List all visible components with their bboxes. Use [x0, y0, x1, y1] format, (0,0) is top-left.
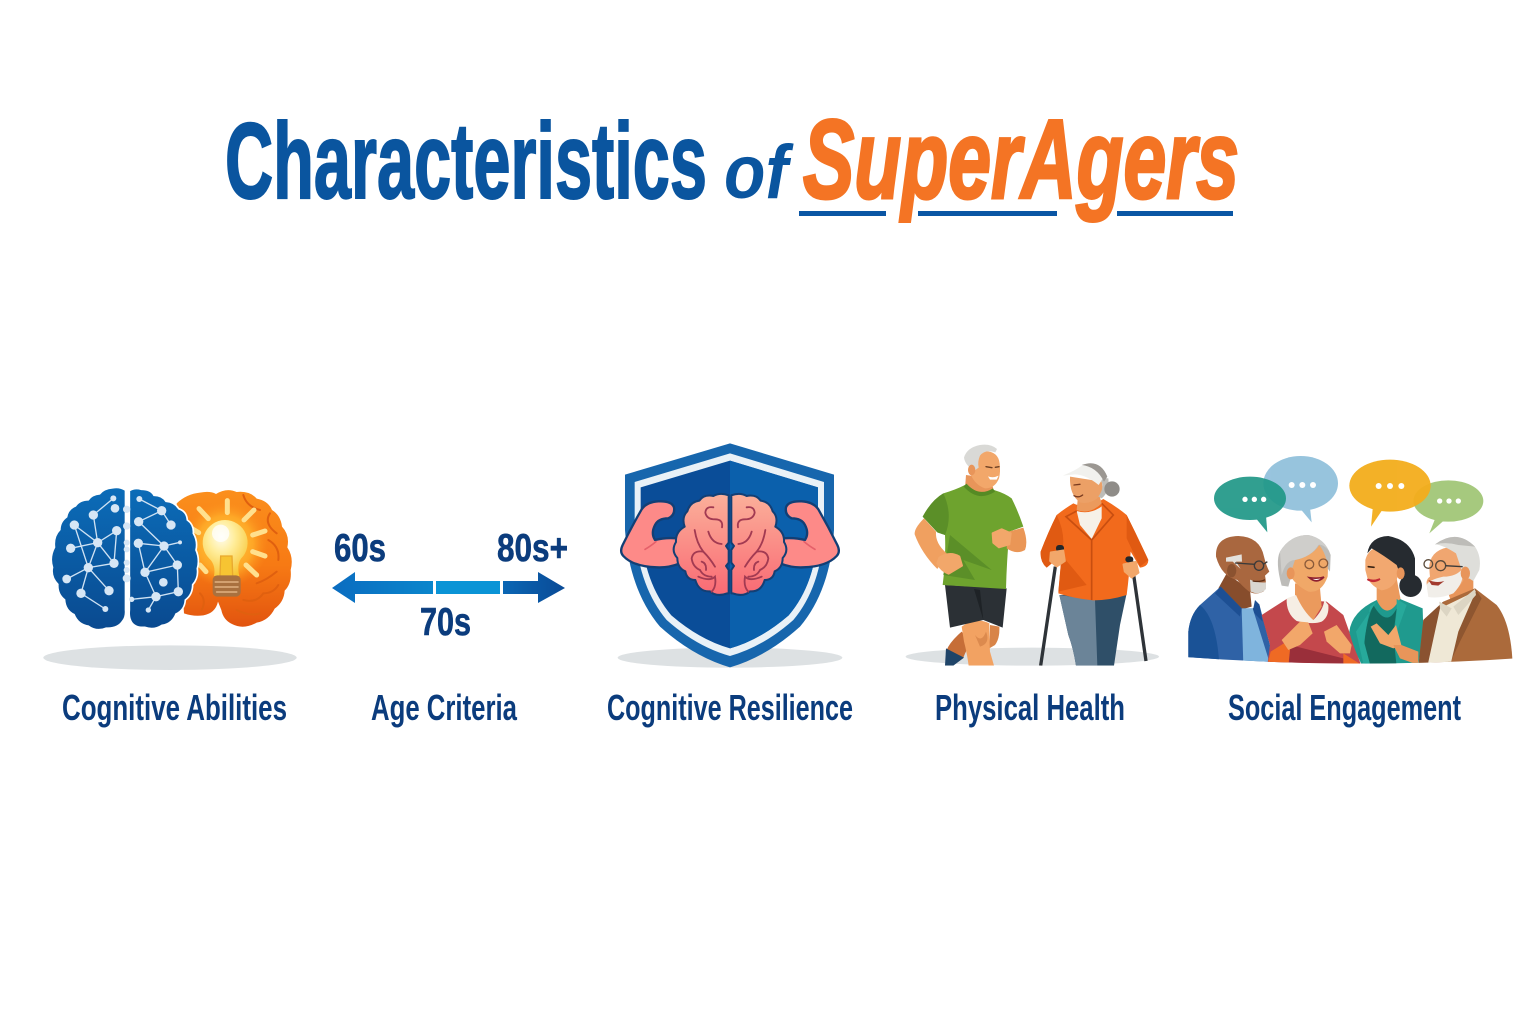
title: [225, 97, 1239, 222]
green bubble: [1413, 480, 1483, 533]
title word: SuperAgers: SuperAgers: [803, 97, 1239, 222]
title word: of: of: [724, 130, 794, 215]
label: cognitive abilities: Cognitive Abilities: [62, 687, 287, 728]
title underline: [799, 211, 1233, 216]
label 70s: 70s: [420, 601, 471, 644]
label 60s: 60s: [334, 527, 386, 570]
teal bubble: [1214, 477, 1286, 532]
label: physical health: Physical Health: [935, 687, 1125, 728]
double-headed arrow: [332, 572, 565, 603]
icon: cognitive abilities brains: [43, 488, 297, 670]
woman in teal: [1349, 536, 1423, 667]
label: cognitive resilience: Cognitive Resilience: [607, 687, 853, 728]
label 80s+: 80s+: [497, 527, 568, 570]
speech bubbles: [1214, 456, 1483, 533]
people: [1188, 535, 1512, 667]
brain: [674, 494, 786, 595]
infographic canvas: [43, 118, 1512, 728]
orange brain with lightbulb: [177, 490, 292, 627]
man jogging: [915, 445, 1026, 666]
icon: shield with muscular brain: [618, 443, 842, 668]
age criteria scale: [332, 527, 568, 644]
ground shadow: [618, 648, 842, 668]
blue bubble: [1263, 456, 1338, 522]
man in brown: [1418, 537, 1512, 667]
woman in red: [1262, 535, 1362, 667]
flexed arms: [621, 501, 839, 567]
label: age criteria: Age Criteria: [371, 687, 518, 728]
ground shadow: [906, 648, 1159, 666]
woman walking with poles: [1041, 463, 1148, 666]
blue network brain: [52, 488, 198, 629]
title word: Characteristics: Characteristics: [225, 100, 707, 221]
ground shadow: [43, 645, 297, 670]
icon: older couple exercising: [906, 445, 1159, 666]
icon: group conversation: [1188, 456, 1512, 667]
man in blue: [1188, 536, 1270, 667]
shield: [625, 443, 834, 667]
bubble dots: [1242, 482, 1461, 504]
orange bubble: [1349, 460, 1431, 527]
